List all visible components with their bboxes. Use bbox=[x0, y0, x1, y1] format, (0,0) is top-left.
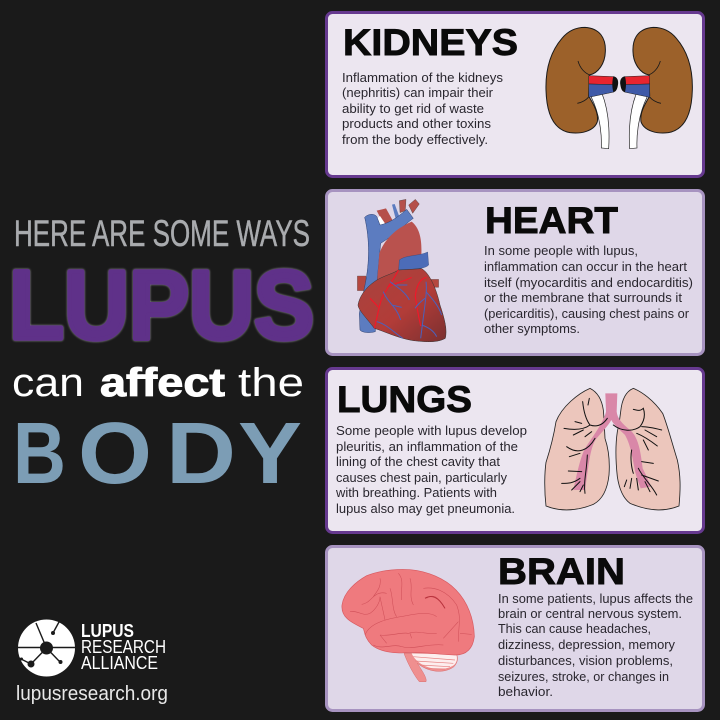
text: lungs description: with breathing. Patients with bbox=[335, 485, 497, 500]
logo: Lupus Research Alliance bbox=[16, 620, 168, 705]
icon: kidneys bbox=[546, 27, 692, 149]
heading: kidneys: KIDNEYS bbox=[343, 22, 518, 63]
text: lungs description: pleuritis, an inflammation of the bbox=[336, 439, 518, 454]
text: brain description: In some patients, lupus affects the bbox=[498, 591, 693, 606]
panel: heart bbox=[326, 190, 704, 354]
text: heart description: In some people with lupus, bbox=[484, 243, 638, 258]
text: lungs description: Some people with lupus develop bbox=[336, 423, 527, 438]
icon: heart bbox=[357, 199, 446, 342]
heading: can affect the: the bbox=[238, 361, 304, 405]
text: heart description: itself (myocarditis and endocarditis) bbox=[484, 275, 693, 290]
text: heart description: other symptoms. bbox=[484, 321, 580, 336]
logo wordmark: LUPUS bbox=[81, 621, 134, 641]
icon: network circle bbox=[18, 620, 75, 676]
logo wordmark bbox=[81, 621, 166, 673]
heading: body bbox=[13, 405, 302, 502]
text: lungs description: lupus also may get pneumonia. bbox=[336, 501, 515, 516]
heading: lungs: LUNGS bbox=[337, 379, 472, 420]
text: heart description: (pericarditis), causing chest pains or bbox=[484, 306, 690, 321]
heading: body: Y bbox=[238, 405, 302, 502]
text: brain description: This can cause headaches, bbox=[498, 621, 651, 636]
icon: brain bbox=[342, 570, 474, 682]
heading: can affect the bbox=[12, 361, 304, 405]
text: brain description: dizziness, depression, memory bbox=[498, 637, 675, 652]
heading: can affect the: can bbox=[12, 361, 84, 405]
text: kidneys description: products and other toxins bbox=[342, 116, 492, 131]
text: heart description: inflammation can occur in the heart bbox=[484, 259, 687, 274]
panel: brain bbox=[326, 546, 704, 710]
left headline bbox=[9, 213, 314, 502]
text: brain description: behavior. bbox=[498, 684, 553, 699]
heading: body: B bbox=[13, 405, 66, 502]
heading: body: D bbox=[166, 405, 236, 502]
text: brain description: seizures, stroke, or changes in bbox=[498, 669, 669, 684]
text: kidneys description: from the body effectively. bbox=[342, 132, 488, 147]
panel: kidneys bbox=[326, 12, 704, 176]
text: lungs description: lining of the chest cavity that bbox=[336, 454, 500, 469]
text: lungs description bbox=[335, 423, 527, 516]
heading: lupus: LUPUS bbox=[9, 250, 314, 360]
heading: can affect the: affect bbox=[100, 361, 225, 405]
text: lungs description: causes chest pain, particularly bbox=[336, 470, 507, 485]
logo wordmark: ALLIANCE bbox=[81, 653, 158, 673]
panel: lungs bbox=[326, 368, 704, 532]
text: kidneys description: Inflammation of the kidneys bbox=[342, 70, 504, 85]
heading: brain: BRAIN bbox=[498, 551, 625, 592]
text: heart description: or the membrane that surrounds it bbox=[484, 290, 682, 305]
text: brain description: brain or central nervous system. bbox=[498, 606, 682, 621]
icon: lungs bbox=[545, 388, 680, 510]
text: brain description: disturbances, vision problems, bbox=[498, 653, 673, 668]
heading: body: O bbox=[78, 405, 152, 502]
text: heart description bbox=[484, 243, 693, 336]
text: brain description bbox=[498, 591, 693, 699]
text: kidneys description bbox=[342, 70, 504, 147]
heading: here are some ways: HERE ARE SOME WAYS bbox=[14, 213, 310, 254]
text: kidneys description: (nephritis) can impair their bbox=[342, 85, 494, 100]
logo wordmark: RESEARCH bbox=[81, 637, 166, 657]
heading: heart: HEART bbox=[485, 200, 618, 241]
website url: lupusresearch.org bbox=[16, 683, 168, 705]
text: kidneys description: ability to get rid of waste bbox=[342, 101, 484, 116]
